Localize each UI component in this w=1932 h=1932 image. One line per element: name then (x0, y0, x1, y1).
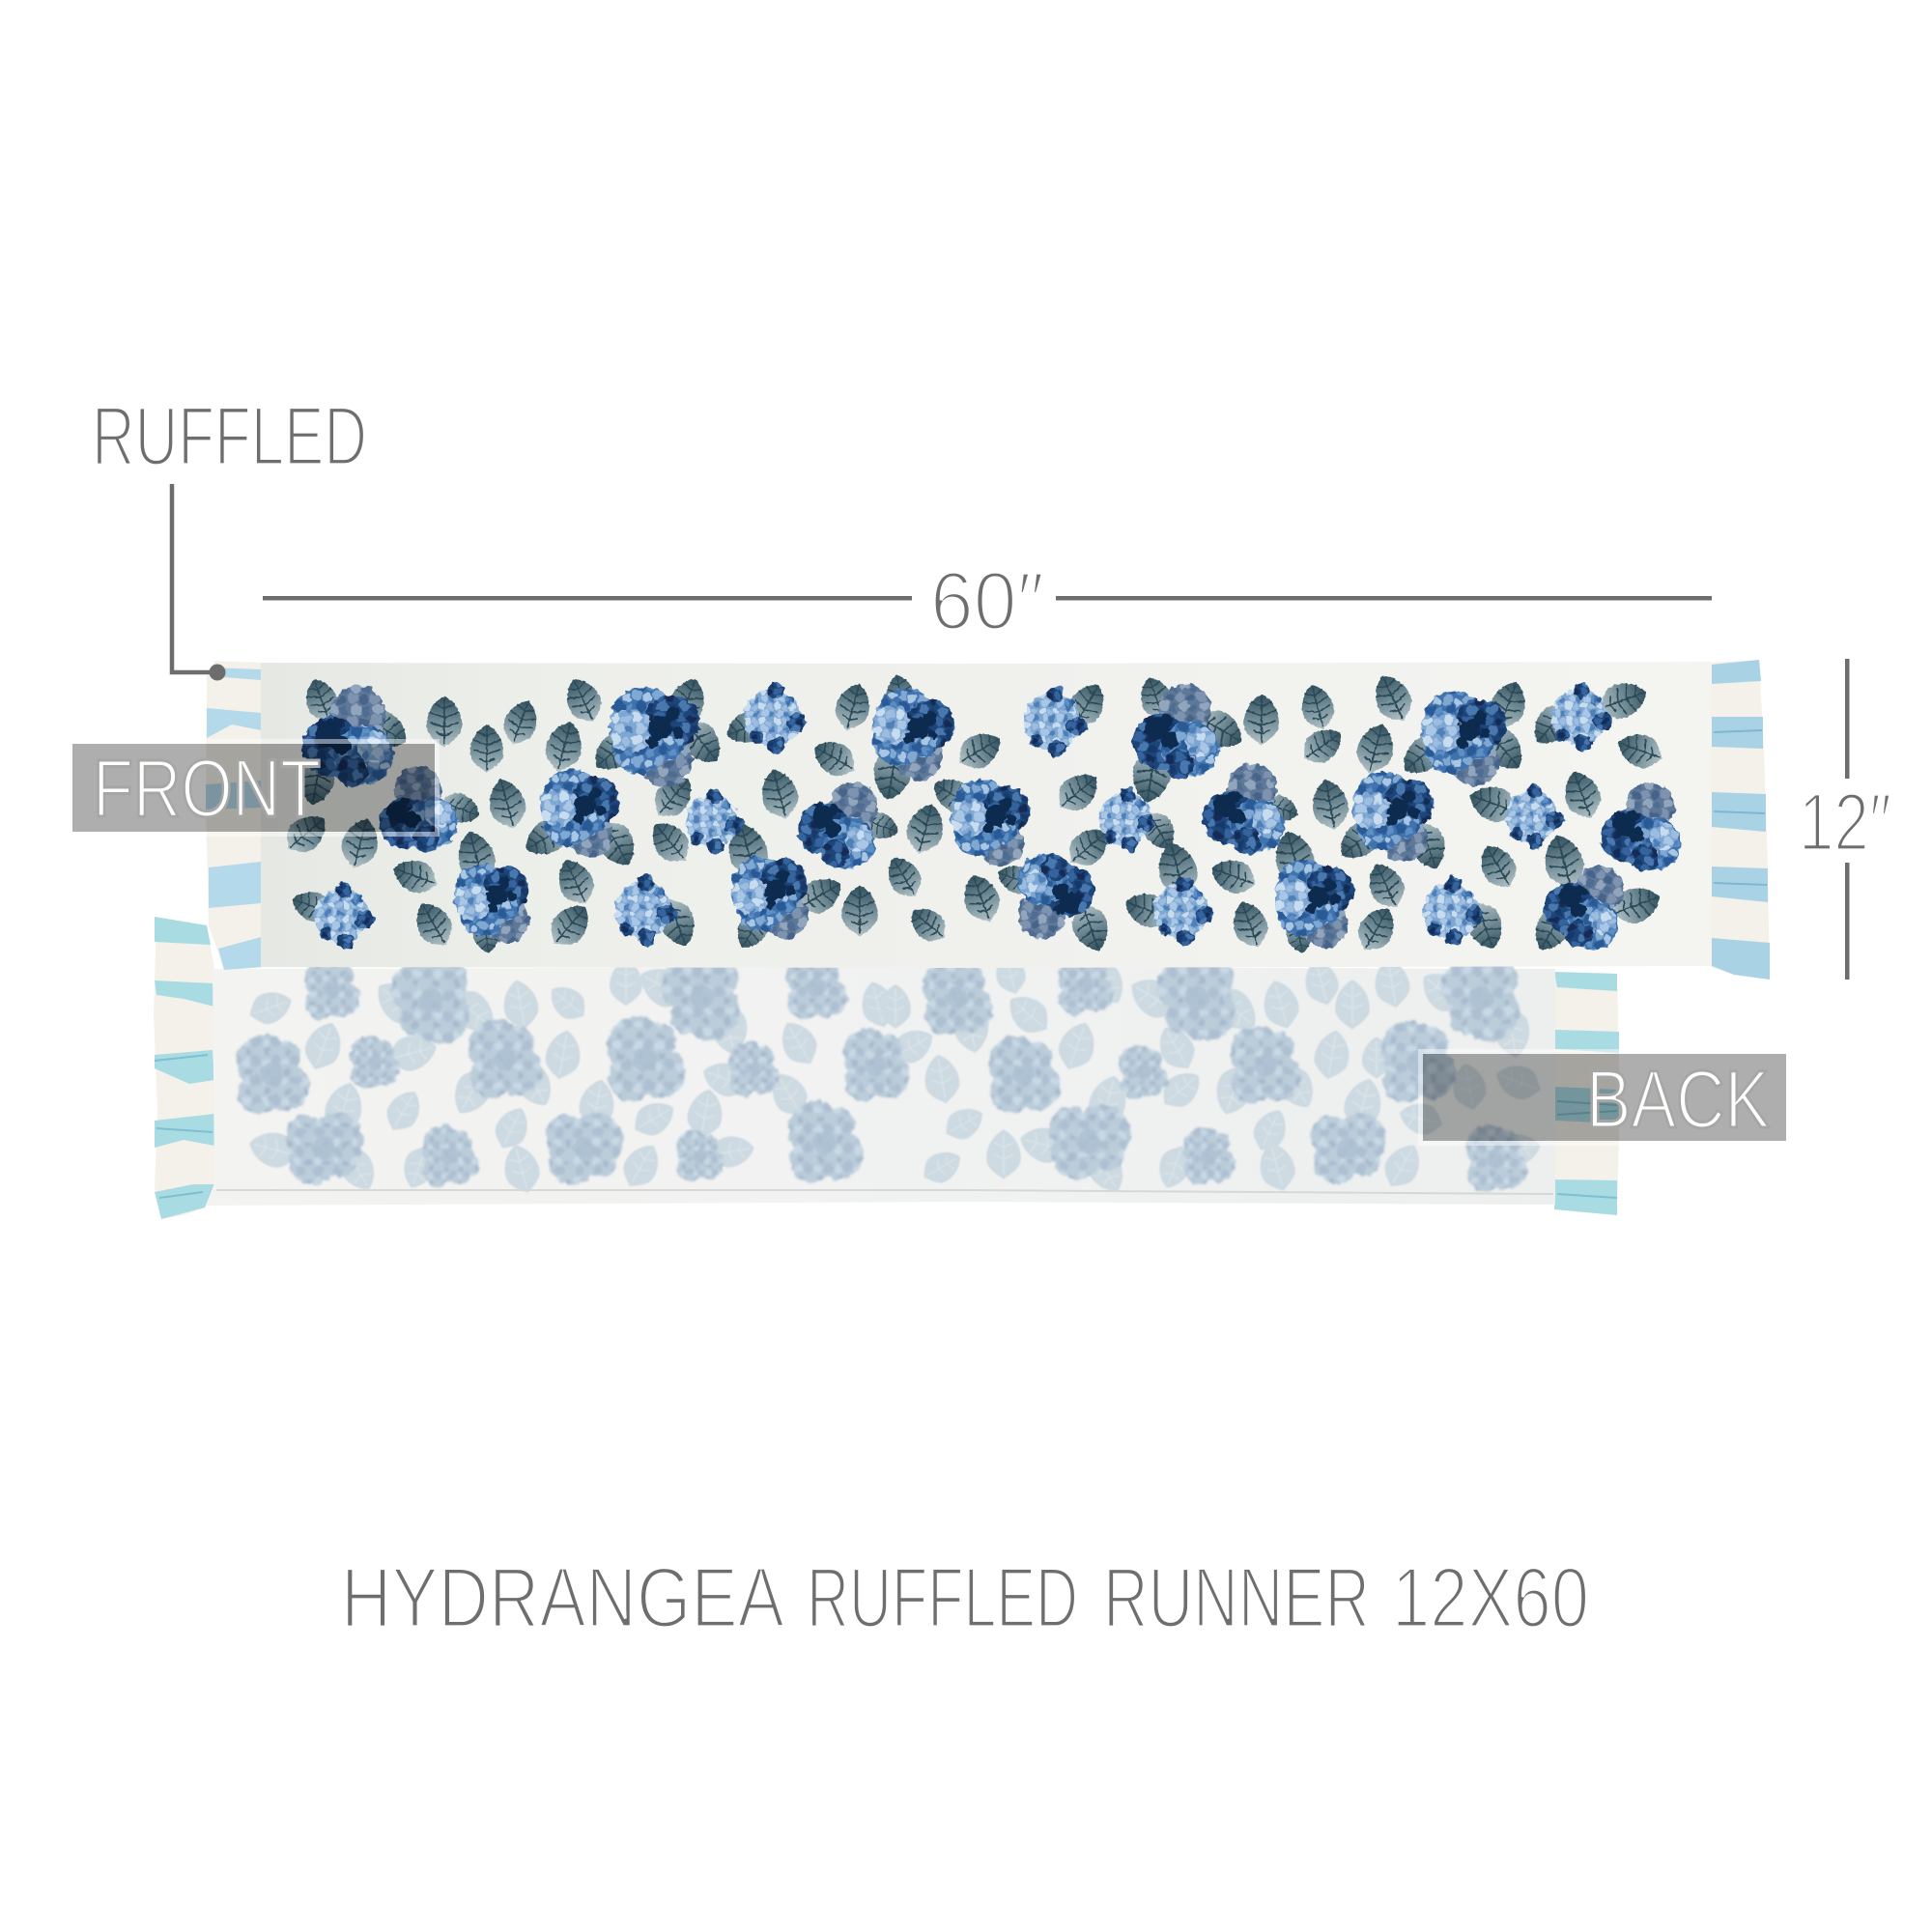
width line left (263, 596, 912, 601)
width line right (1056, 596, 1712, 601)
leaves attached to blooms (288, 672, 1665, 957)
front label box (72, 744, 435, 832)
back hem seam (216, 1190, 1553, 1194)
panel: front of runner (206, 660, 1770, 980)
front left ruffle (206, 661, 263, 970)
callout: ruffled label (92, 390, 367, 680)
ruffled leader line (172, 484, 217, 672)
label: back (1420, 1051, 1789, 1145)
title: RUFFLED (807, 1549, 1078, 1645)
back label box (1423, 1054, 1786, 1141)
back right ruffle (1554, 972, 1619, 1215)
label: front (70, 742, 437, 835)
width value: 60″ (930, 555, 1044, 646)
faded leaves, back print (244, 950, 1547, 1199)
front label text: FRONT (93, 743, 321, 834)
title: RUNNER (1103, 1549, 1370, 1645)
front label border (70, 742, 437, 835)
back left ruffle (154, 917, 214, 1219)
title (341, 1549, 1589, 1645)
height value: 12″ (1799, 777, 1891, 867)
back fabric body (206, 967, 1555, 1206)
faded hydrangeas, back print (237, 953, 1527, 1192)
back label text: BACK (1586, 1054, 1770, 1145)
title: HYDRANGEA (341, 1549, 784, 1645)
dimension: 60 inch width (263, 555, 1712, 646)
dimension: 12 inch height (1799, 659, 1891, 980)
front right ruffle (1710, 660, 1770, 980)
back label border (1420, 1051, 1789, 1144)
ruffled text: RUFFLED (92, 390, 367, 483)
panel: back of runner (154, 917, 1619, 1219)
height line top (1845, 659, 1849, 779)
title: 12X60 (1392, 1549, 1589, 1645)
ruffled leader dot (209, 665, 226, 680)
hydrangea blooms, front print (302, 682, 1681, 958)
height line bottom (1845, 863, 1849, 980)
front fabric body (261, 662, 1711, 968)
scattered leaves, front print (278, 668, 1668, 958)
